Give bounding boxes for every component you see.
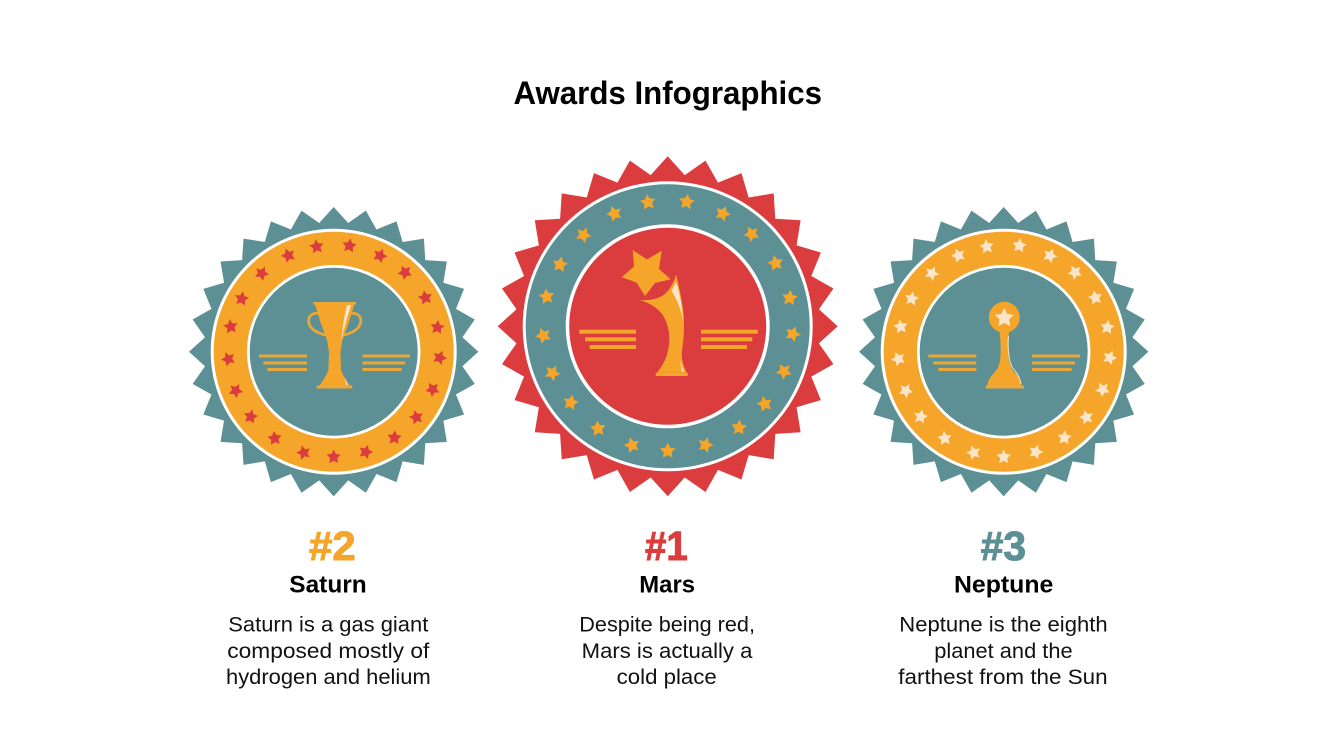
white inner ring (566, 224, 770, 428)
badge: #3 Neptune (859, 207, 1148, 496)
teal centre (920, 268, 1088, 436)
red stars (219, 237, 449, 463)
white outer ring (523, 181, 813, 471)
right ribbon lines (701, 330, 758, 349)
text: Mars description: cold place (617, 666, 717, 689)
serrated outer edge (859, 207, 1148, 496)
icon: trophy cup (309, 302, 361, 388)
white inner ring (917, 265, 1090, 439)
icon: star orb trophy (986, 302, 1024, 388)
serrated outer edge (498, 156, 838, 496)
cream stars (889, 237, 1119, 463)
orange stars (533, 193, 803, 458)
text: Neptune description: Neptune is the eighth (899, 614, 1108, 636)
right ribbon lines (362, 354, 410, 371)
left ribbon lines (928, 354, 976, 371)
text: Saturn description (226, 614, 431, 689)
text: Saturn description: composed mostly of (227, 640, 429, 663)
icon: shooting star trophy (622, 250, 688, 376)
text: Saturn description: hydrogen and helium (226, 666, 431, 689)
white outer ring (211, 229, 457, 475)
orange star ring (884, 232, 1124, 472)
white outer ring (881, 229, 1127, 475)
text: Neptune description: farthest from the Sun (898, 666, 1108, 689)
badge: #1 Mars (498, 156, 838, 496)
teal centre (250, 268, 418, 436)
text: Neptune description: planet and the (934, 640, 1073, 663)
serrated outer edge (189, 207, 478, 496)
white inner ring (247, 265, 420, 439)
title: Awards Infographics (514, 75, 822, 111)
left ribbon lines (259, 354, 307, 371)
badge: #2 Saturn (189, 207, 478, 496)
text: Mars description: Despite being red, (579, 614, 755, 636)
rank: #3: #3 (981, 523, 1026, 569)
orange star ring (214, 232, 454, 472)
rank: #2: #2 (309, 523, 356, 569)
heading: Neptune: Neptune (954, 572, 1053, 598)
text: Mars description (579, 614, 755, 689)
text: Neptune description (898, 614, 1108, 689)
text: Saturn description: Saturn is a gas giant (228, 614, 428, 636)
teal star ring (526, 184, 810, 468)
red centre (569, 228, 766, 425)
rank: #1: #1 (645, 523, 688, 569)
heading: Saturn: Saturn (289, 572, 367, 598)
left ribbon lines (579, 330, 636, 349)
text: Mars description: Mars is actually a (582, 640, 753, 663)
heading: Mars: Mars (639, 572, 695, 598)
right ribbon lines (1032, 354, 1080, 371)
